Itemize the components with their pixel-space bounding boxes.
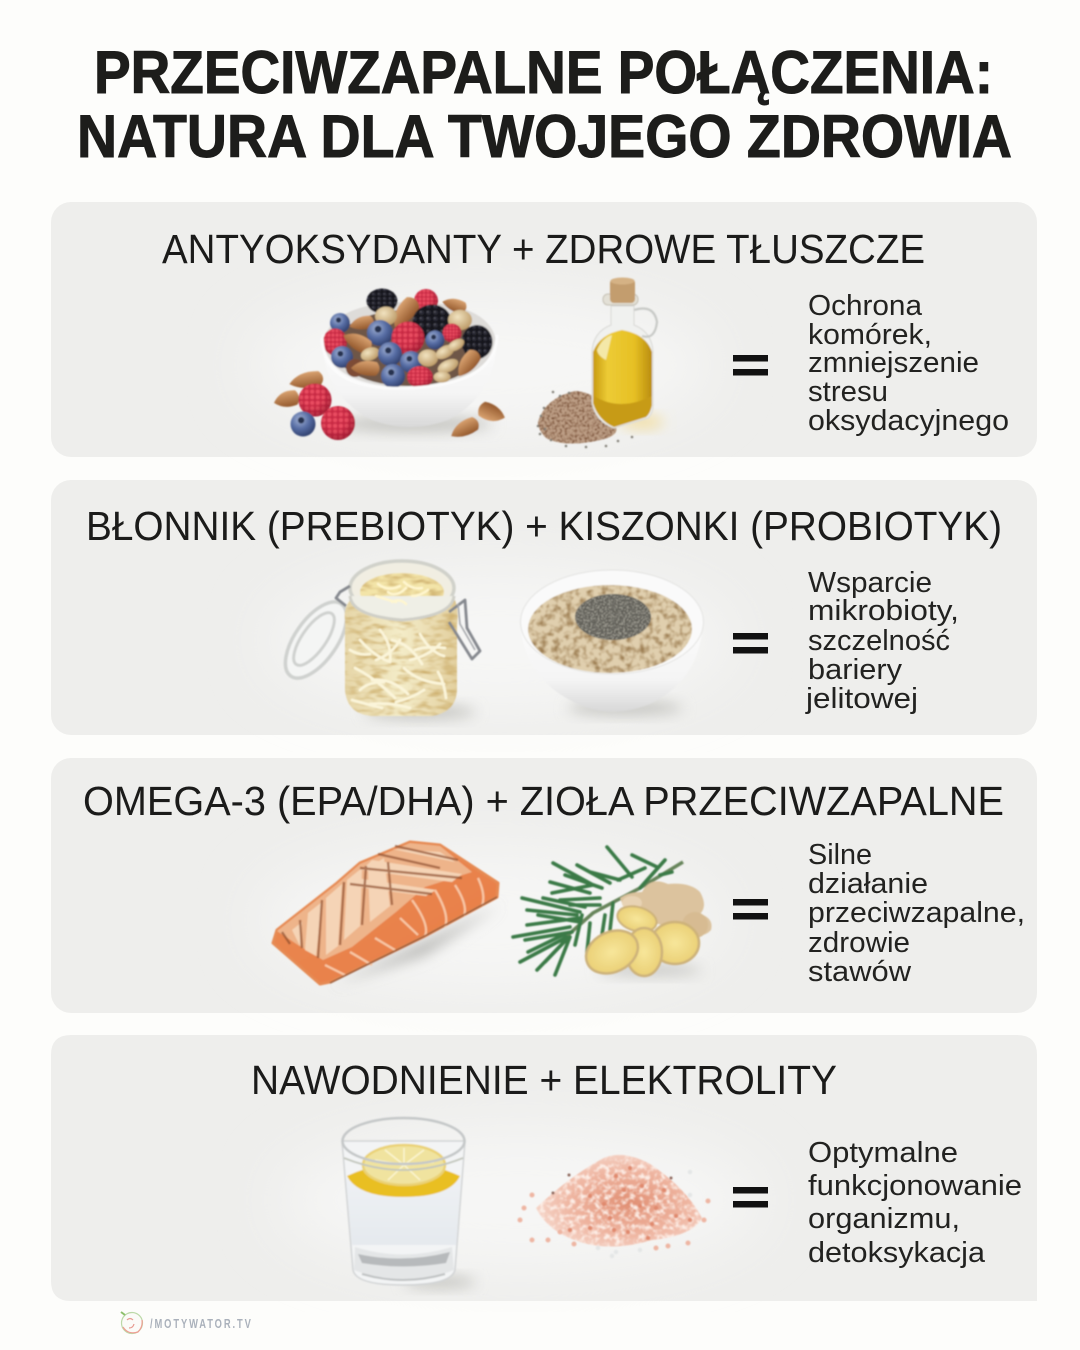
jar clasps (336, 586, 480, 659)
icon: linseed and oil bottle (538, 278, 664, 447)
result text: wsparcie mikrobioty (805, 567, 959, 715)
heading: omega-3: OMEGA-3 (EPA/DHA) + ZIOŁA PRZECIWZAPALNE (83, 778, 1004, 824)
title (77, 39, 1012, 170)
heading: nawodnienie: NAWODNIENIE + ELEKTROLITY (251, 1057, 837, 1103)
result text: ochrona komórek: stresu (808, 376, 888, 408)
result text: wsparcie mikrobioty: mikrobioty, (808, 595, 959, 627)
icon: equals sign (733, 355, 768, 376)
result text: ochrona komórek: zmniejszenie (808, 347, 979, 379)
icon: equals sign (733, 1187, 768, 1208)
icon: logo face (121, 1312, 142, 1334)
title: PRZECIWZAPALNE POŁĄCZENIA: (94, 39, 993, 106)
icon: bowl of oats with chia (520, 570, 704, 715)
result text: wsparcie mikrobioty: bariery (808, 654, 903, 686)
result text: silne działanie: działanie (808, 868, 928, 900)
result text: silne działanie: Silne (808, 839, 872, 871)
heading: antyoksydanty: ANTYOKSYDANTY + ZDROWE TŁUSZCZE (162, 226, 925, 272)
result text: ochrona komórek: Ochrona (808, 290, 923, 322)
result text: optymalne funkcjonowanie: funkcjonowanie (808, 1170, 1022, 1202)
panel: omega-3 + zioła (51, 758, 1037, 1013)
icon: pink himalayan salt (520, 1155, 708, 1256)
heading: błonnik: BŁONNIK (PREBIOTYK) + KISZONKI (PROBIOTYK) (86, 503, 1002, 549)
result text: silne działanie (808, 839, 1025, 988)
result text: silne działanie: przeciwzapalne, (808, 897, 1025, 929)
result text: optymalne funkcjonowanie: Optymalne (808, 1137, 958, 1169)
icon: glass of water with lemon (342, 1118, 476, 1288)
ginger slices (615, 902, 659, 936)
open glass lid (274, 592, 358, 688)
result text: ochrona komórek: komórek, (808, 319, 932, 351)
watermark logo (121, 1312, 251, 1334)
result text: silne działanie: stawów (808, 956, 912, 988)
title: NATURA DLA TWOJEGO ZDROWIA (77, 103, 1012, 170)
result text: optymalne funkcjonowanie: organizmu, (808, 1203, 960, 1235)
icon: rosemary and ginger (513, 847, 712, 982)
panel: błonnik + kiszonki (51, 480, 1037, 735)
icon: grilled salmon (273, 842, 500, 984)
result text: ochrona komórek: oksydacyjnego (808, 405, 1009, 437)
result text: wsparcie mikrobioty: jelitowej (805, 683, 918, 715)
result text: optymalne funkcjonowanie: detoksykacja (808, 1237, 986, 1269)
icon: bowl of berries and nuts (272, 288, 508, 442)
result text: wsparcie mikrobioty: szczelność (808, 625, 950, 657)
result text: optymalne funkcjonowanie (808, 1137, 1022, 1269)
ginger root (620, 881, 712, 935)
icon: equals sign (733, 633, 768, 654)
icon: equals sign (733, 899, 768, 920)
watermark text: /MOTYWATOR.TV (150, 1318, 251, 1331)
result text: ochrona komórek (808, 290, 1009, 437)
result text: silne działanie: zdrowie (808, 927, 910, 959)
result text: wsparcie mikrobioty: Wsparcie (808, 567, 932, 599)
icon: jar of sauerkraut (274, 561, 480, 719)
panel: nawodnienie + elektrolity (51, 1035, 1037, 1301)
panel: antyoksydanty + zdrowe tłuszcze (51, 202, 1037, 457)
